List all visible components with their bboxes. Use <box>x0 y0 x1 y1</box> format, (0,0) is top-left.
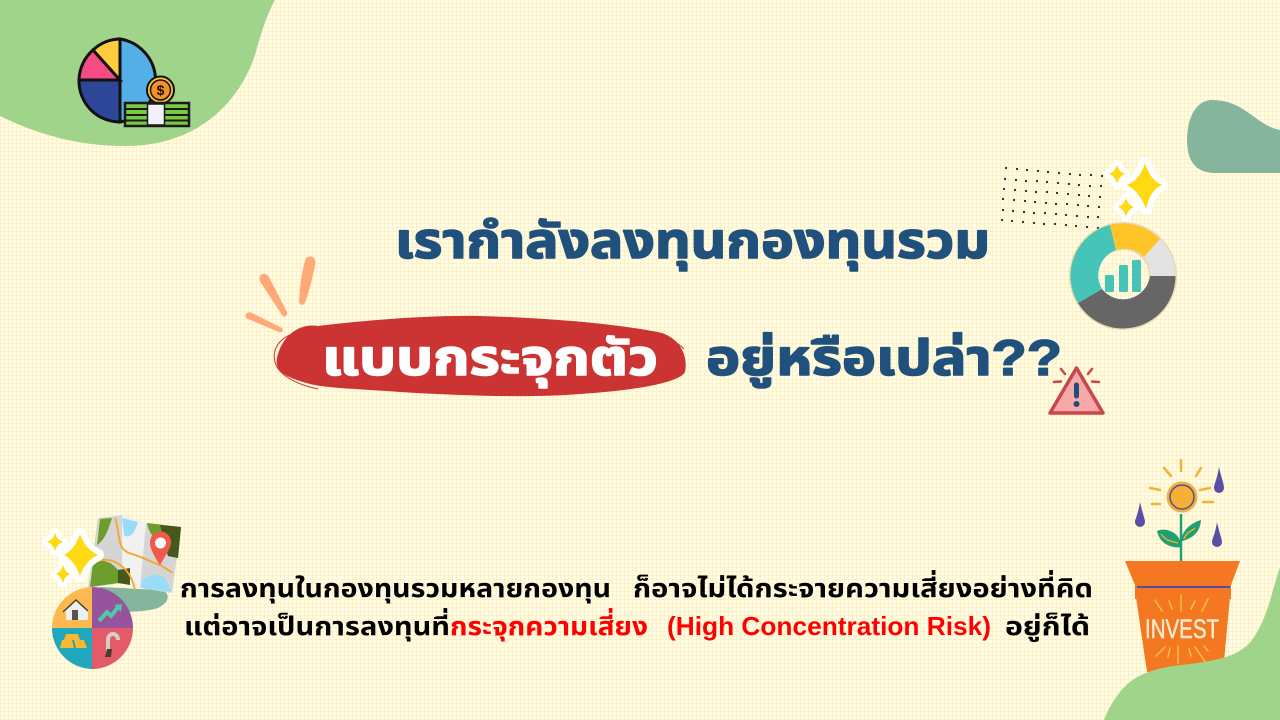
icon: folded map <box>88 515 181 593</box>
heading line 1: เรากำลังลงทุนกองทุนรวม <box>395 213 990 271</box>
dot pattern <box>1001 167 1103 229</box>
icon: asset class circle <box>52 587 133 669</box>
body text line 1: ก็อาจไม่ได้กระจายความเสี่ยงอย่างที่คิด <box>633 570 1093 603</box>
body text line 2: แต่อาจเป็นการลงทุนที่ <box>184 608 450 642</box>
heading line 2: อยู่หรือเปล่า?? <box>706 330 1062 388</box>
icon: donut chart <box>1070 223 1176 328</box>
icon: sparkles bottom left <box>47 533 98 583</box>
blob: top-left green <box>0 0 275 146</box>
accent strokes: orange burst <box>246 256 315 332</box>
body text line 2: (High Concentration Risk) <box>667 611 991 641</box>
icon: invest flower pot <box>1125 460 1240 672</box>
body text line 1: การลงทุนในกองทุนรวมหลายกองทุน <box>180 573 611 604</box>
icon: warning triangle <box>1050 368 1103 413</box>
blob: small teal behind map <box>100 587 168 612</box>
body text line 2: กระจุกความเสี่ยง <box>450 608 648 642</box>
icon: invest flower pot: INVEST <box>1145 614 1219 644</box>
body text line 2: อยู่ก็ได้ <box>1005 611 1090 642</box>
heading highlight text: แบบกระจุกตัว <box>322 330 658 388</box>
red brush highlight <box>274 316 686 396</box>
icon: pie chart with money: $ <box>157 82 165 98</box>
icon: sparkles top right <box>1109 163 1162 217</box>
body text line 2 <box>184 608 1090 642</box>
blob: bottom-right green <box>1104 567 1280 720</box>
blob: top-right teal <box>1187 100 1280 173</box>
icon: pie chart with money <box>79 39 189 126</box>
body text line 1 <box>180 570 1093 604</box>
